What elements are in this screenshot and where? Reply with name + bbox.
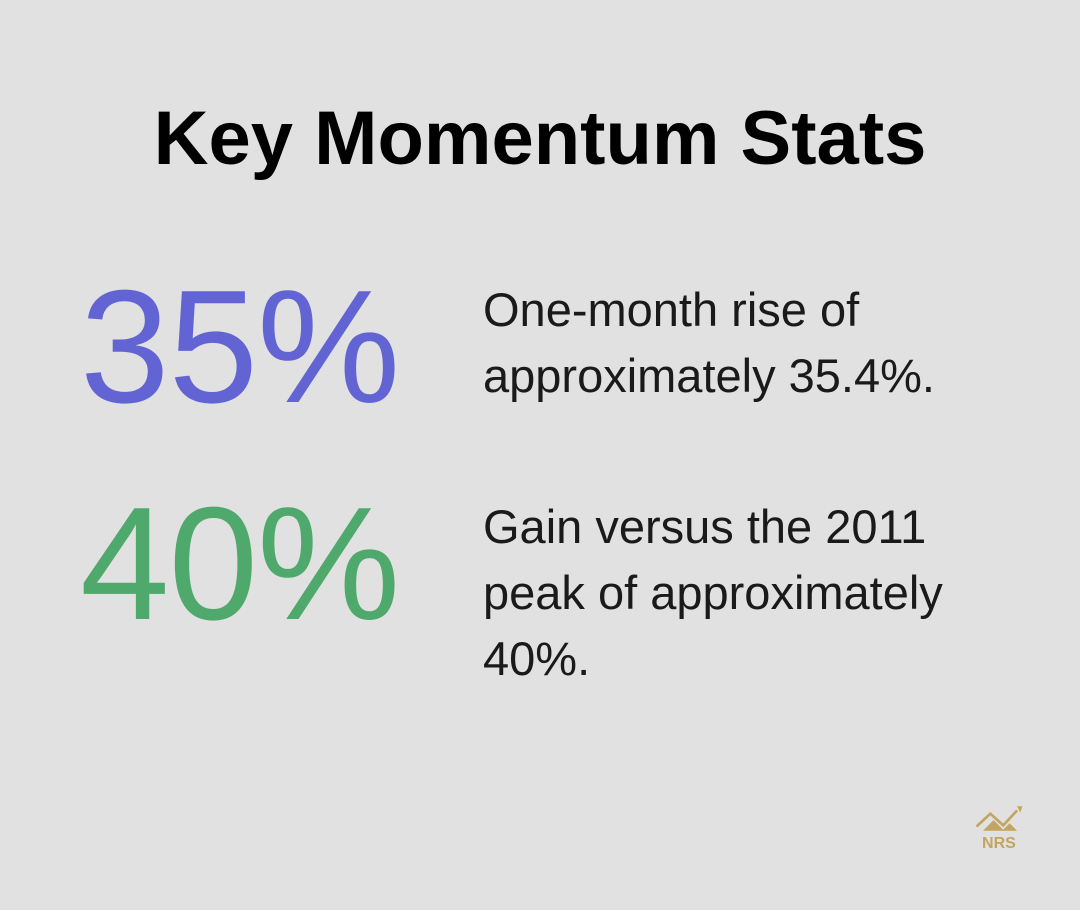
title: Key Momentum Stats [154, 96, 926, 181]
text: one-month rise: One-month rise of [483, 283, 859, 336]
text: gain vs 2011 peak [483, 500, 943, 685]
text: gain vs 2011 peak: 40%. [483, 632, 590, 685]
text: one-month rise: approximately 35.4%. [483, 349, 935, 402]
text: one-month rise [483, 283, 935, 402]
text: gain vs 2011 peak: Gain versus the 2011 [483, 500, 926, 553]
stat: 40%: 40% [80, 474, 399, 654]
text: gain vs 2011 peak: peak of approximately [483, 566, 943, 619]
logo: NRS [976, 806, 1022, 851]
stat: 35%: 35% [80, 257, 399, 437]
